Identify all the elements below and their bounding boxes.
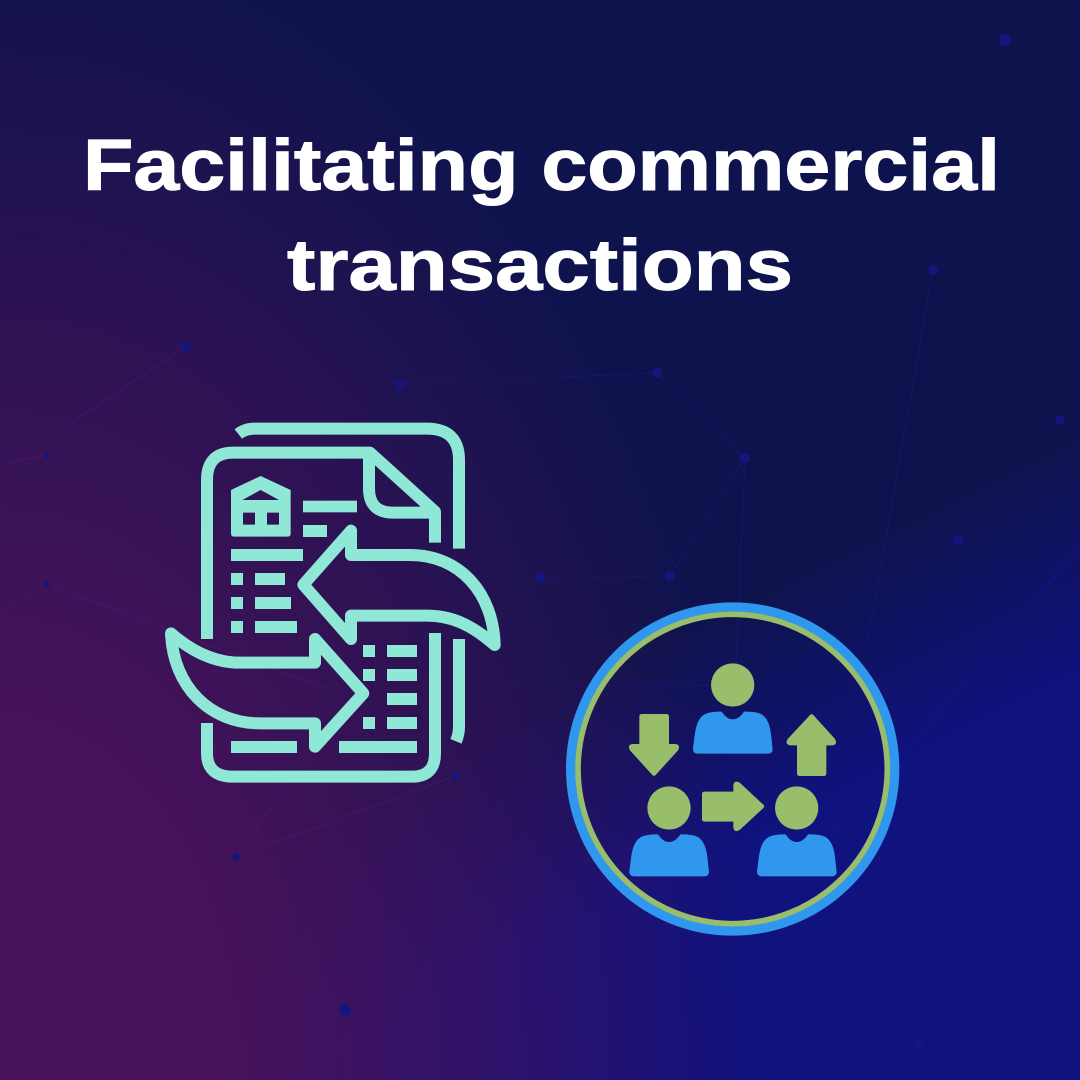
title: Facilitating commercial <box>83 126 1000 206</box>
back page outline <box>238 429 459 741</box>
arrow: right <box>702 782 764 831</box>
arrow: left <box>303 531 495 645</box>
person bottom left <box>629 786 709 876</box>
house icon <box>231 476 291 537</box>
icon: people exchange circle <box>571 607 895 931</box>
front page outline <box>207 453 435 777</box>
person bottom right <box>757 786 837 876</box>
title: transactions <box>287 226 793 306</box>
icon: document exchange <box>171 429 495 777</box>
green ring <box>578 614 887 924</box>
document text lines <box>231 501 417 753</box>
title <box>83 126 1000 306</box>
arrow: down <box>629 714 679 776</box>
blue ring <box>571 607 895 931</box>
arrow: up <box>787 714 836 776</box>
arrow: right <box>171 633 363 747</box>
person top <box>693 663 773 754</box>
